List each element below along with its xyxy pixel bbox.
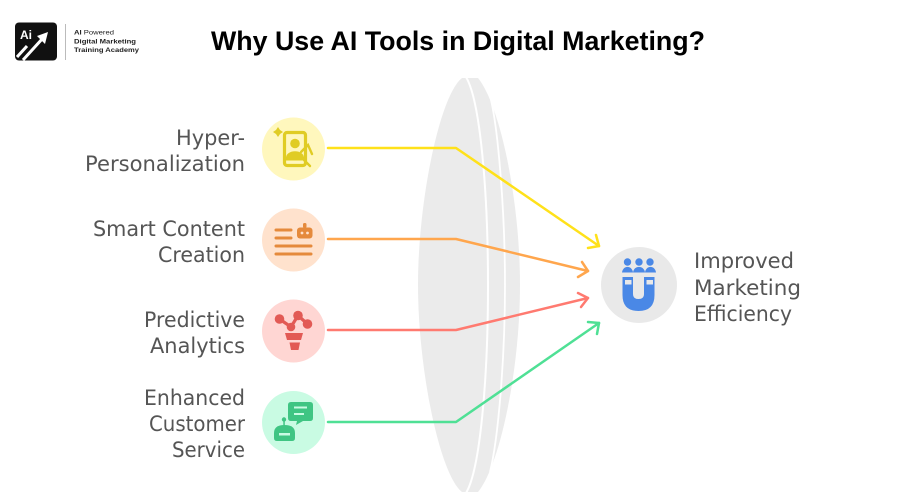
arrow: hyper-personalization: [328, 148, 599, 248]
logo text: Digital Marketing: [74, 38, 136, 46]
label: enhanced customer service: Customer: [149, 412, 245, 436]
label: improved marketing efficiency: Marketing: [694, 276, 801, 300]
label: smart content creation: Creation: [158, 243, 245, 267]
title: Why Use AI Tools in Digital Marketing?: [211, 26, 705, 56]
label: predictive analytics: Analytics: [150, 334, 245, 358]
label: predictive analytics: [144, 308, 245, 358]
label: smart content creation: Smart Content: [93, 217, 245, 241]
icon: hyper-personalization: [262, 118, 325, 180]
logo: [15, 22, 139, 60]
label: improved marketing efficiency: Improved: [694, 249, 794, 273]
label: smart content creation: [93, 217, 245, 267]
label: enhanced customer service: Service: [172, 438, 245, 462]
label: hyper-personalization: Hyper-: [176, 126, 245, 150]
icon: customer service: [262, 391, 325, 454]
lens shape: [418, 77, 520, 493]
icon: smart content: [262, 208, 325, 272]
arrow: smart content: [328, 239, 588, 277]
label: improved marketing efficiency: [694, 249, 801, 326]
icon: predictive analytics: [262, 300, 325, 362]
label: enhanced customer service: Enhanced: [144, 386, 245, 410]
logo text: Training Academy: [74, 47, 139, 54]
arrow: predictive analytics: [328, 293, 588, 330]
label: hyper-personalization: Personalization: [85, 152, 245, 176]
arrow: customer service: [328, 322, 599, 422]
label: enhanced customer service: [144, 386, 245, 462]
label: hyper-personalization: [85, 126, 245, 176]
logo text: AI Powered: [74, 30, 114, 36]
logo text: [74, 30, 139, 54]
logo mark: Ai: [20, 28, 32, 42]
label: improved marketing efficiency: Efficiency: [694, 302, 792, 326]
label: predictive analytics: Predictive: [144, 308, 245, 332]
icon: improved marketing efficiency: [601, 247, 677, 323]
